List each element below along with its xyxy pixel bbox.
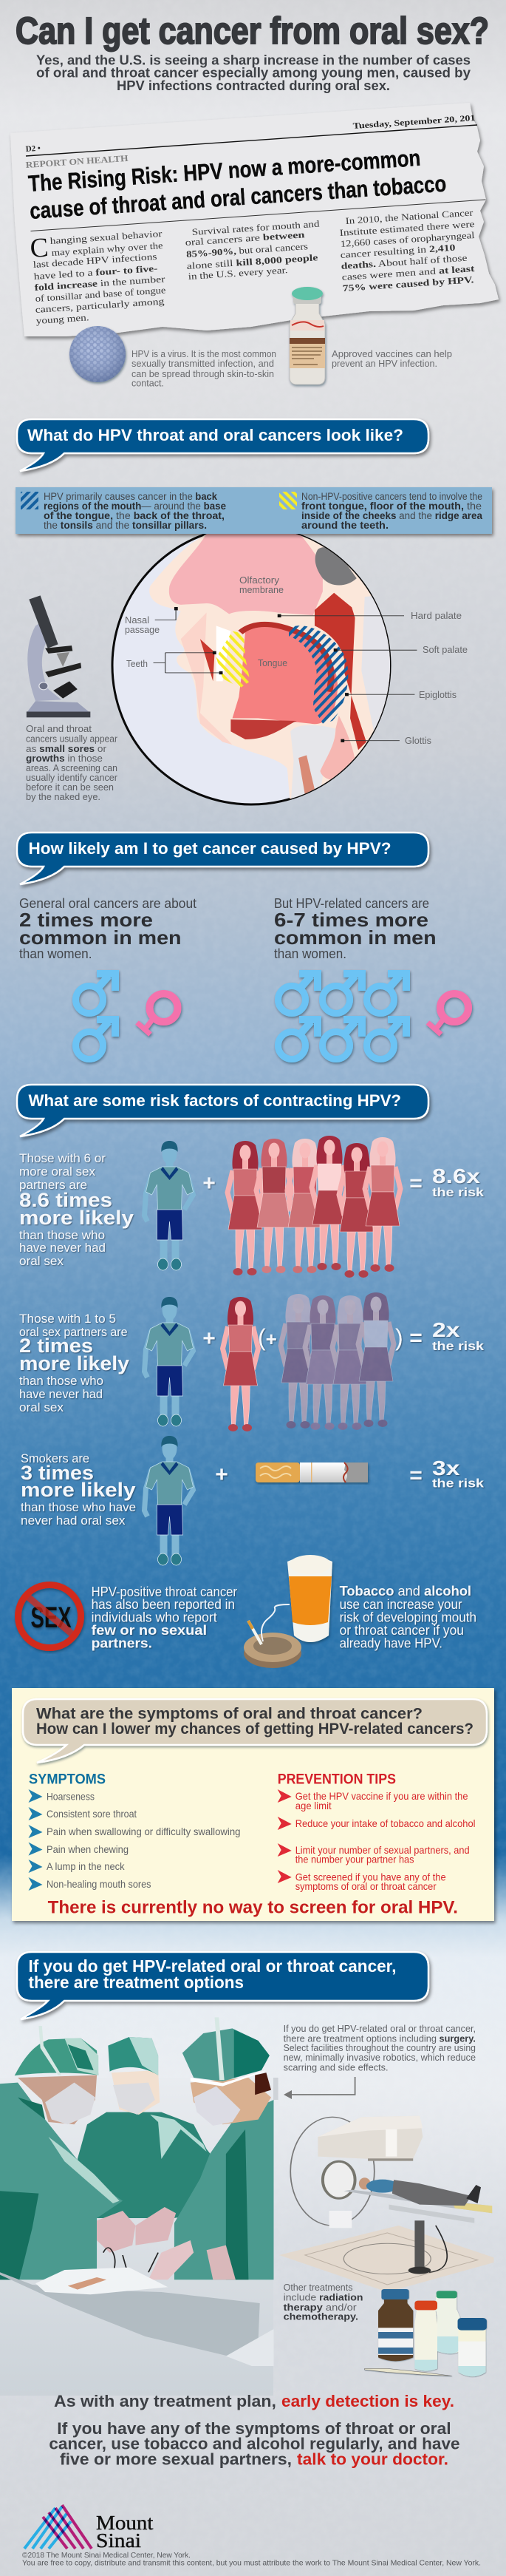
figure: man, row two (145, 1297, 194, 1426)
text: one to five partners: than those who (19, 1374, 103, 1388)
result: 8.6x risk (409, 1165, 485, 1199)
anatomy labels: passage (125, 624, 160, 635)
torn paper (10, 103, 499, 336)
text: tobacco and alcohol (340, 1584, 476, 1650)
result: 8.6x risk: 8.6x (432, 1165, 481, 1187)
text: other treatments (284, 2282, 363, 2322)
list: prevention tips: Reduce your intake of tobacco and alcohol (295, 1817, 476, 1829)
kicker: REPORT ON HEALTH (25, 153, 129, 170)
text: tobacco and alcohol: Tobacco and alcohol (340, 1584, 471, 1599)
icon: microscope (27, 595, 90, 717)
text: microscope note: by the naked eye. (26, 791, 100, 802)
column 1: cancers, particularly among (35, 296, 165, 315)
stat: general oral cancers: common in men (19, 926, 182, 949)
text: surgery: If you do get HPV-related oral or throat cancer, (284, 2024, 476, 2034)
text: microscope note: Oral and throat (26, 723, 92, 734)
list: prevention tips: symptoms of oral or throat cancer (295, 1880, 437, 1892)
column 1: C (29, 232, 49, 264)
text: surgery: new, minimally invasive robotics, which reduce (284, 2053, 476, 2063)
list: symptoms: Consistent sore throat (47, 1808, 137, 1820)
figures: six women (228, 1136, 400, 1278)
page marker: D2 • (25, 144, 41, 154)
heading: treatment options: there are treatment options (28, 1973, 244, 1992)
text: HPV is a virus (131, 349, 276, 389)
text: one to five partners: more likely (19, 1352, 129, 1375)
list: symptoms (28, 1772, 241, 1891)
text: non-HPV regions (301, 491, 482, 531)
text: HPV is a virus: contact. (131, 379, 164, 389)
result: 2x risk: 2x (432, 1318, 460, 1341)
illustration: surgeons (0, 2017, 273, 2366)
column 3: In 2010, the National Cancer (345, 207, 474, 226)
panel: location legend band (16, 487, 492, 534)
column 1: fold increase in the number (34, 274, 166, 293)
text: one to five partners: oral sex (19, 1400, 64, 1414)
stat: HPV related cancers: 6-7 times more (274, 909, 428, 931)
anatomy labels: Epiglottis (419, 689, 457, 700)
icons: gender ratio six to one (278, 970, 468, 1059)
text: smokers: Smokers are (21, 1451, 89, 1465)
closing statement: five or more sexual partners, (60, 2450, 292, 2468)
text: microscope note: as small sores or (26, 743, 107, 754)
arrow: to surgeons (284, 2077, 355, 2099)
list: symptoms: A lump in the neck (47, 1860, 126, 1872)
column 1: hanging sexual behavior (49, 228, 163, 246)
text: smokers: never had oral sex (21, 1514, 126, 1528)
copyright: ©2018 The Mount Sinai Medical Center, New York. (22, 2551, 191, 2560)
swatch: HPV region (21, 492, 38, 509)
text: HPV regions: the tonsils and the tonsillar pillars. (44, 520, 207, 531)
column 2: oral cancers are between (185, 229, 305, 248)
text: microscope note: usually identify cancer (26, 772, 118, 783)
closing statement: talk to your doctor. (297, 2450, 448, 2468)
heading: how likely (17, 833, 428, 884)
logo: Mount Sinai: Sinai (96, 2529, 141, 2552)
anatomy labels: Glottis (405, 735, 431, 746)
subtitle (36, 53, 471, 93)
text: few or no partners: has also been reported in (92, 1597, 235, 1612)
anatomy labels: Teeth (126, 658, 148, 669)
text: six or more partners: more likely (19, 1207, 134, 1229)
text: surgery (284, 2024, 476, 2073)
closing statement: If you have any of the symptoms of throat or oral (57, 2419, 451, 2438)
text: six or more partners: Those with 6 or (19, 1151, 106, 1165)
list: symptoms: Pain when swallowing or difficulty swallowing (47, 1826, 241, 1837)
result: 3x risk: = (409, 1463, 423, 1488)
anatomy labels: Nasal (125, 614, 149, 626)
text: other treatments: chemotherapy. (284, 2312, 358, 2322)
column 2: in the U.S. every year. (188, 265, 288, 282)
text: one to five partners: Those with 1 to 5 (19, 1312, 116, 1326)
symbol: plus, row three: + (215, 1462, 228, 1487)
text: six or more partners (19, 1151, 134, 1268)
list: prevention tips: Get the HPV vaccine if you are within the (295, 1790, 468, 1802)
column 3: 75% were caused by HPV. (342, 274, 474, 294)
heading: symptoms and prevention (23, 1699, 487, 1763)
subtitle: of oral and throat cancer especially among young men, caused by (36, 66, 471, 81)
bar: panel edge (273, 2078, 278, 2100)
heading: treatment options: If you do get HPV-related oral or throat cancer, (28, 1956, 396, 1976)
text: one to five partners: 2 times (19, 1335, 93, 1357)
list: prevention tips: PREVENTION TIPS (278, 1772, 396, 1788)
text: HPV is a virus: can be spread through skin-to-skin (131, 369, 274, 379)
text: microscope note: before it can be seen (26, 782, 114, 793)
anatomy labels: Soft palate (423, 644, 468, 655)
text: tobacco and alcohol: already have HPV. (340, 1636, 442, 1650)
closing statement: cancer, use tobacco and alcohol regularly, and have (49, 2435, 459, 2453)
closing statement: early detection is key. (281, 2392, 454, 2410)
column 3: cases were men and at least (341, 263, 476, 282)
anatomy labels: Olfactory (239, 574, 280, 586)
text: few or no partners (92, 1584, 237, 1650)
text: other treatments: Other treatments (284, 2282, 353, 2293)
copyright (22, 2551, 481, 2567)
headline: The Rising Risk: HPV now a more-common (27, 145, 421, 197)
closing statement (49, 2392, 459, 2468)
headline (27, 145, 447, 224)
text: HPV regions: regions of the mouth— around the base (44, 501, 226, 512)
text: vaccines: prevent an HPV infection. (332, 359, 437, 369)
column 2: Survival rates for mouth and (191, 218, 321, 237)
heading: treatment options (17, 1952, 428, 2019)
icon: no sex sign: SEX (31, 1601, 72, 1634)
column 1: young men. (35, 312, 89, 326)
text: non-HPV regions: inside of the cheeks and the ridge area (301, 510, 482, 521)
text: tobacco and alcohol: or throat cancer if you (340, 1623, 464, 1638)
column 1: may explain why over the (51, 240, 163, 258)
leader lines (154, 607, 417, 742)
text: microscope note: cancers usually appear (26, 733, 118, 745)
text: non-HPV regions: around the teeth. (301, 520, 389, 531)
text: HPV is a virus: sexually transmitted infection, and (131, 359, 274, 369)
text: tobacco and alcohol: use can increase your (340, 1597, 462, 1612)
text: vaccines (332, 349, 452, 369)
column 1 (29, 228, 166, 326)
masthead rule (26, 125, 477, 156)
anatomy labels: membrane (239, 584, 284, 595)
stat: HPV related cancers: But HPV-related cancers are (274, 896, 429, 911)
text: surgery: there are treatment options including surgery. (284, 2034, 476, 2044)
text: few or no partners: partners. (92, 1636, 152, 1650)
figures: four faded women (281, 1292, 394, 1430)
result: 8.6x risk: the risk (432, 1185, 485, 1199)
list: symptoms: Non-healing mouth sores (47, 1878, 151, 1890)
list: prevention tips: age limit (295, 1800, 332, 1811)
stat: general oral cancers: 2 times more (19, 909, 153, 931)
text: non-HPV regions: Non-HPV-positive cancers tend to involve the (301, 491, 482, 502)
illustration: medicine vials and syringe (365, 2289, 487, 2376)
text: six or more partners: partners are (19, 1178, 87, 1192)
anatomy labels: Hard palate (411, 610, 462, 621)
list: symptoms: Hoarseness (47, 1790, 95, 1802)
anatomy labels: Tongue (258, 657, 287, 668)
column 2: alone still kill 8,000 people (186, 252, 318, 271)
result: 2x risk: the risk (432, 1339, 485, 1353)
icon: no sex sign (18, 1585, 81, 1647)
panel: newspaper clipping (10, 103, 499, 336)
list: symptoms: SYMPTOMS (29, 1772, 106, 1788)
text: one to five partners: have never had (19, 1387, 103, 1401)
heading: risk factors (17, 1085, 428, 1136)
date: Tuesday, September 20, 201 (352, 114, 476, 131)
column 2 (185, 218, 321, 282)
symbol: open bracket plus: (+ (258, 1324, 277, 1351)
subtitle: HPV infections contracted during oral sex. (117, 78, 390, 93)
stat: general oral cancers: General oral cancers are about (19, 896, 196, 911)
headline rule (31, 200, 486, 231)
text: vaccines: Approved vaccines can help (332, 349, 452, 359)
figure: man, row three (145, 1436, 194, 1565)
result: 3x risk: 3x (432, 1457, 460, 1479)
illustration: radiation machine (279, 2116, 493, 2292)
heading: symptoms and prevention: What are the symptoms of oral and throat cancer? (36, 1705, 423, 1723)
text: smokers: more likely (21, 1479, 136, 1501)
diagram: head cross-section (112, 526, 468, 808)
text: six or more partners: oral sex (19, 1254, 64, 1268)
symbol: plus, row two: + (202, 1326, 216, 1351)
icon: vaccine vial (290, 287, 325, 384)
swatch: non-HPV region (279, 492, 297, 509)
result: 3x risk (409, 1457, 485, 1491)
text: smokers: 3 times (21, 1462, 94, 1484)
column 3: cancer resulting in 2,410 (340, 243, 456, 260)
text: few or no partners: few or no sexual (92, 1623, 207, 1638)
column 1: last decade HPV infections (33, 251, 157, 270)
icon: HPV virus (69, 326, 126, 382)
panel: surgeon background (0, 2078, 273, 2396)
text: HPV regions (44, 491, 226, 531)
heading: how likely: How likely am I to get cancer caused by HPV? (28, 839, 392, 858)
text: non-HPV regions: front tongue, floor of the mouth, the (301, 501, 482, 512)
list: prevention tips: Get screened if you have any of the (295, 1871, 446, 1882)
text: few or no partners: individuals who report (92, 1610, 217, 1625)
column 3: 12,660 cases of oropharyngeal (340, 230, 475, 249)
text: surgery: Select facilities throughout the country are using (284, 2043, 476, 2053)
text: six or more partners: than those who (19, 1228, 105, 1242)
stat: HPV related cancers: than women. (274, 946, 346, 961)
column 1: of tonsillar and base of tongue (35, 285, 166, 304)
heading: what do cancers look like (17, 419, 428, 471)
text: surgery: scarring and side effects. (284, 2063, 389, 2073)
callout: no screening: There is currently no way to screen for oral HPV. (48, 1897, 458, 1918)
text: HPV is a virus: HPV is a virus. It is the most common (131, 349, 276, 359)
icon: beer glass and ashtray (244, 1555, 332, 1668)
text: HPV regions: of the tongue, the back of the throat, (44, 510, 225, 521)
subtitle: Yes, and the U.S. is seeing a sharp increase in the number of cases (36, 53, 471, 68)
text: other treatments: include radiation (284, 2293, 363, 2303)
panel: symptoms and prevention (12, 1688, 494, 1921)
text: six or more partners: 8.6 times (19, 1189, 112, 1211)
heading: risk factors: What are some risk factors of contracting HPV? (28, 1091, 401, 1110)
text: microscope note: areas. A screening can (26, 762, 117, 773)
heading: symptoms and prevention: How can I lower my chances of getting HPV-related cancers? (36, 1721, 473, 1738)
stat: general oral cancers: than women. (19, 946, 92, 961)
text: smokers: than those who have (21, 1500, 136, 1514)
column 3: Institute estimated there were (339, 219, 475, 238)
column 2: 85%-90%, but oral cancers (186, 241, 308, 260)
text: six or more partners: have never had (19, 1241, 106, 1255)
result: 2x risk (395, 1318, 485, 1353)
icon: cigarette (256, 1462, 368, 1482)
text: few or no partners: HPV-positive throat cancer (92, 1584, 237, 1599)
column 1: have led to a four- to five- (33, 263, 158, 282)
text: one to five partners: oral sex partners are (19, 1325, 127, 1339)
stat: general oral cancers (19, 896, 196, 961)
result: 2x risk: ) (395, 1324, 403, 1351)
text: smokers (21, 1451, 136, 1528)
column 3: deaths. About half of those (341, 253, 468, 271)
stat: HPV related cancers (274, 896, 437, 961)
text: microscope note: growths in those (26, 753, 103, 764)
text: one to five partners (19, 1312, 129, 1414)
list: symptoms: Pain when chewing (47, 1843, 129, 1855)
result: 2x risk: = (409, 1326, 423, 1350)
result: 3x risk: the risk (432, 1476, 485, 1491)
column 3 (339, 207, 476, 294)
figure: one woman (223, 1297, 259, 1431)
text: microscope note (26, 723, 118, 802)
logo: Mount Sinai: Mount (96, 2512, 154, 2534)
result: 8.6x risk: = (409, 1171, 423, 1196)
logo: Mount Sinai (24, 2505, 154, 2552)
heading: what do cancers look like: What do HPV throat and oral cancers look like? (27, 426, 403, 444)
stat: HPV related cancers: common in men (274, 926, 437, 949)
list: prevention tips (278, 1772, 476, 1892)
symbol: plus, row one: + (202, 1171, 216, 1196)
anatomy labels (125, 574, 468, 746)
list: prevention tips: Limit your number of sexual partners, and (295, 1844, 470, 1856)
text: tobacco and alcohol: risk of developing mouth (340, 1610, 476, 1625)
text: other treatments: therapy and/or (284, 2302, 357, 2313)
text: six or more partners: more oral sex (19, 1165, 95, 1179)
closing statement: As with any treatment plan, (54, 2392, 276, 2410)
list: prevention tips: the number your partner has (295, 1854, 414, 1865)
icons: gender ratio two to one (75, 970, 177, 1059)
copyright: You are free to copy, distribute and transmit this content, but you must attribute the work to The Mount Sinai Medical Center, New York. (22, 2558, 481, 2567)
text: HPV regions: HPV primarily causes cancer in the back (44, 491, 217, 502)
figure: man, row one (145, 1141, 194, 1270)
